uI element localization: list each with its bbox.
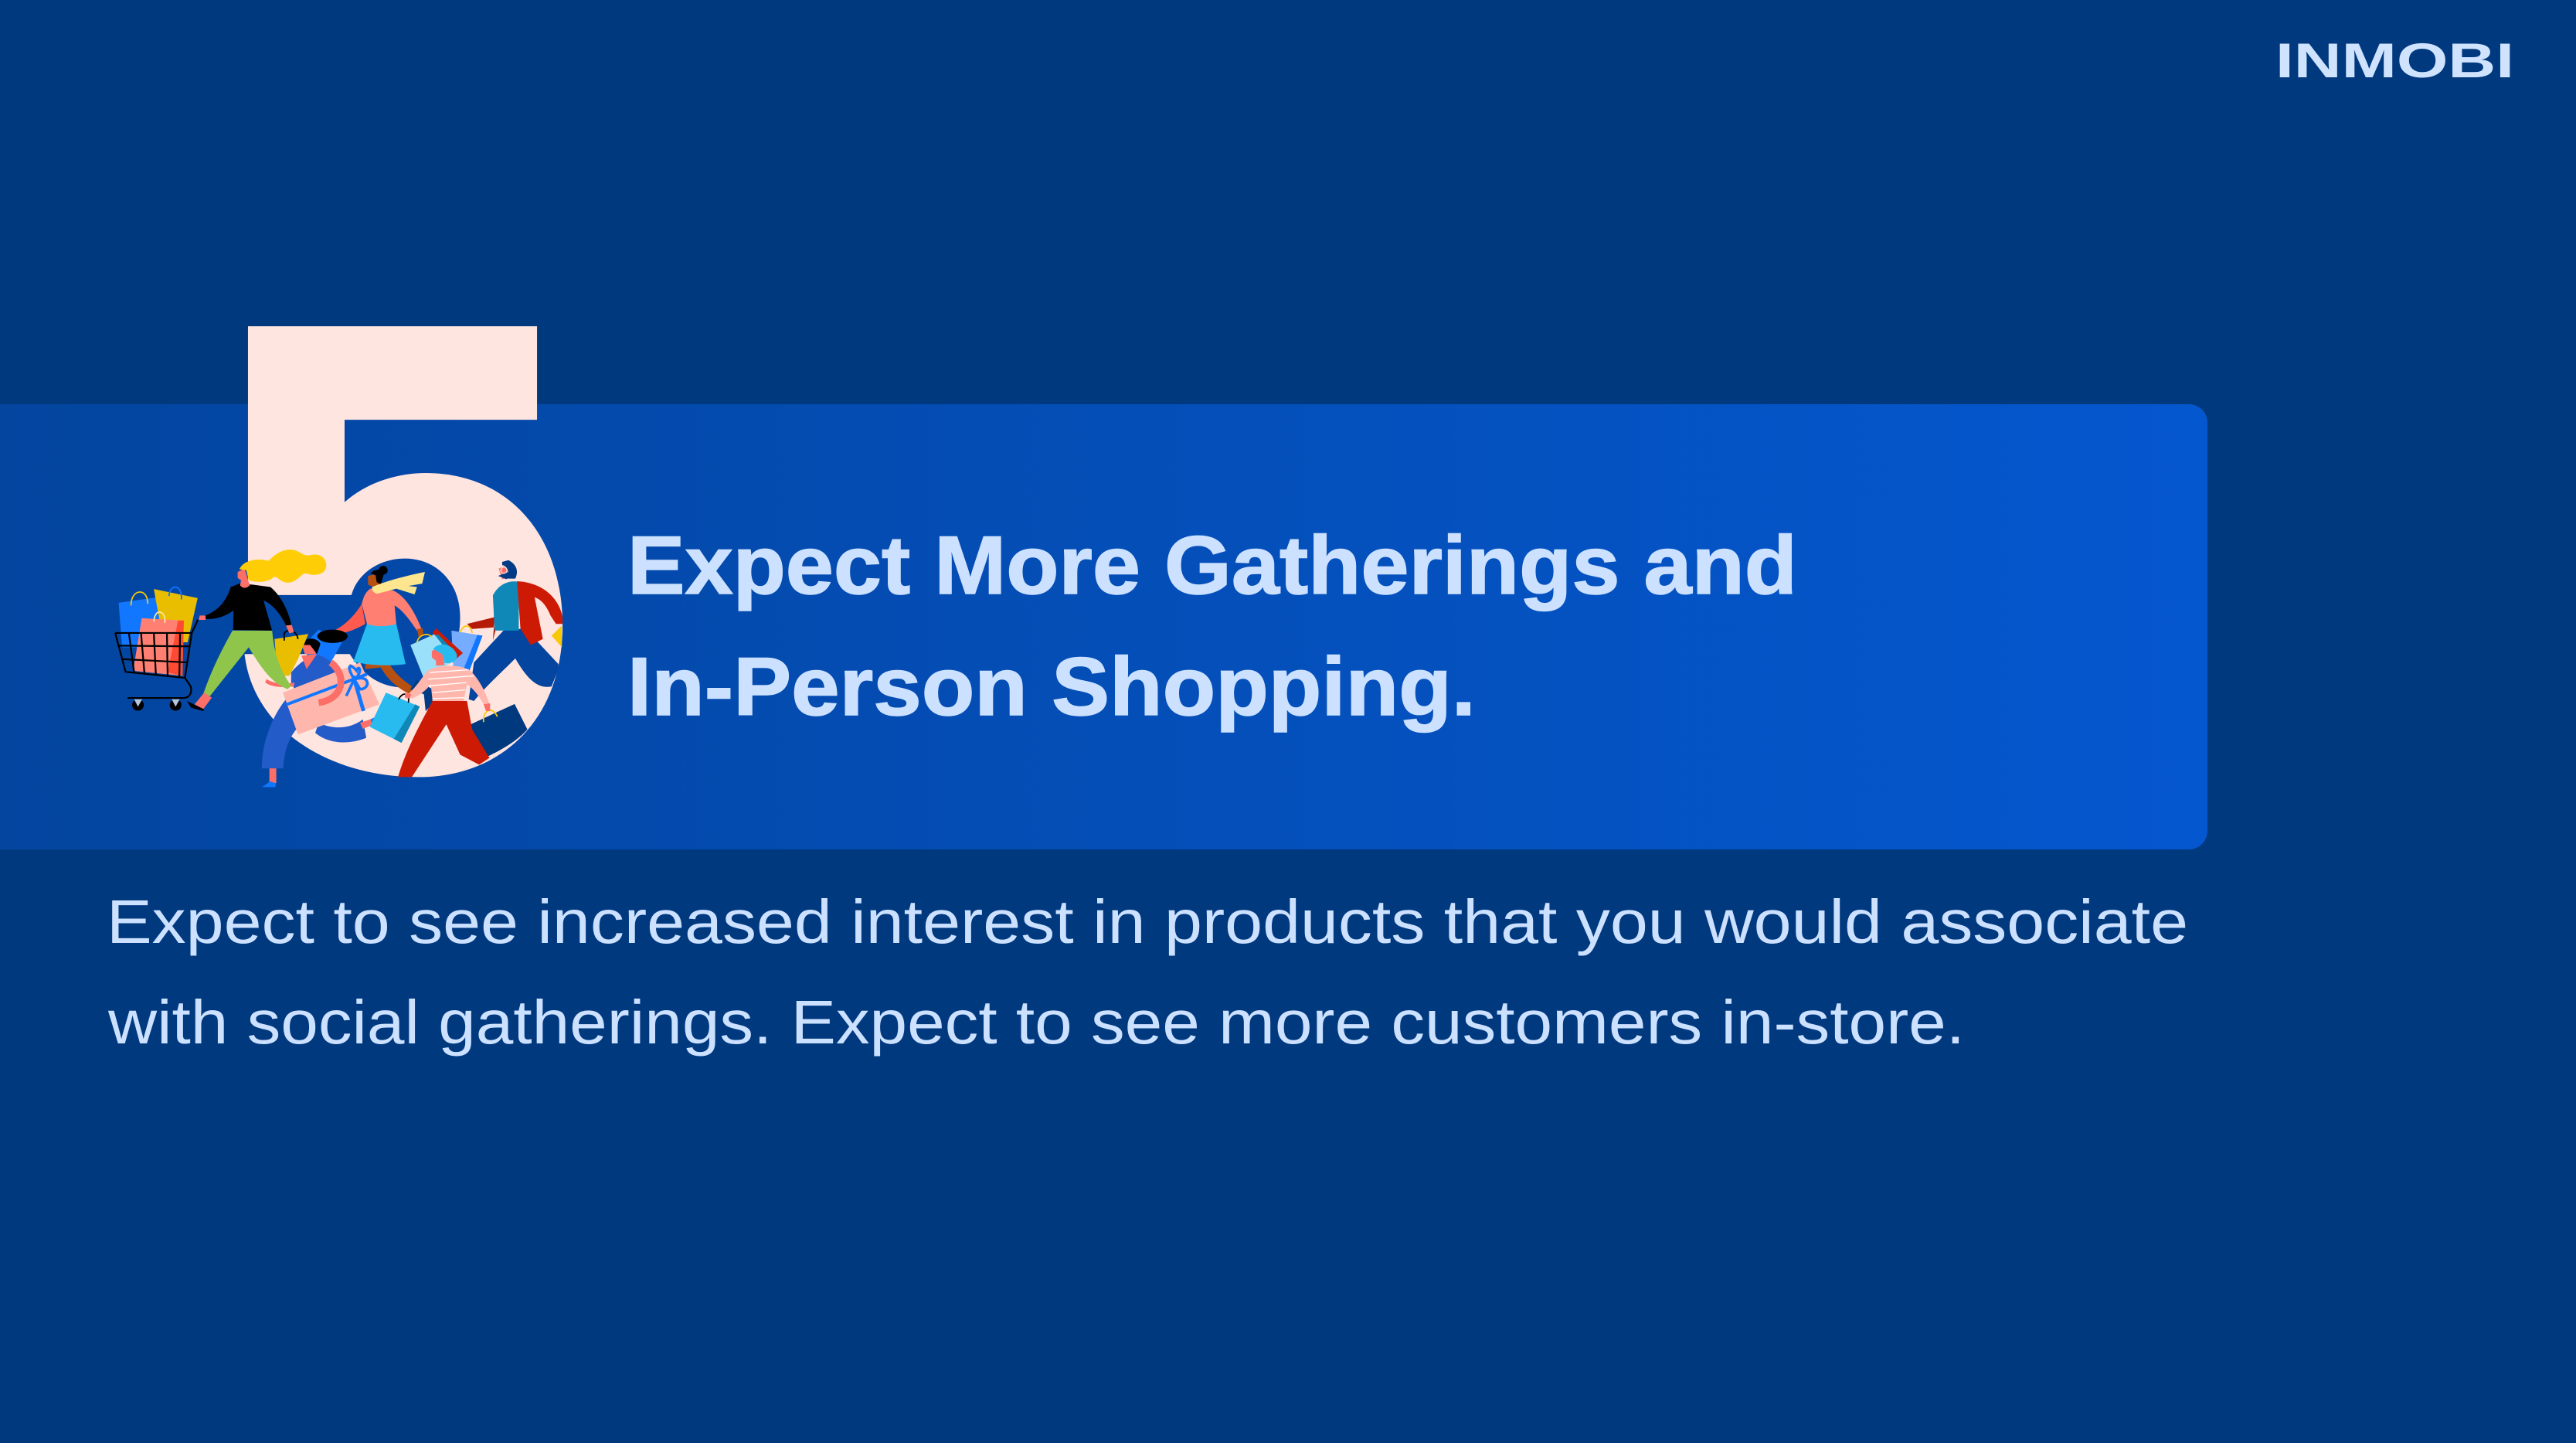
illustration: number five with shoppers [115, 326, 562, 787]
body text [107, 887, 2188, 1057]
body text: Expect to see increased interest in products that you would associate [107, 887, 2188, 956]
man's blue shopping bag [451, 631, 483, 672]
panel: headline banner [0, 404, 2207, 849]
pale blue bag [433, 628, 463, 659]
heading [627, 519, 1797, 733]
shopper: woman with gift box [262, 630, 381, 787]
shopper: woman in green trousers with cart [187, 550, 326, 711]
shopper: man in red jacket [451, 560, 562, 701]
heading: In-Person Shopping. [627, 640, 1476, 733]
scarf [372, 572, 425, 594]
flowing hair [240, 550, 326, 583]
navy bag [465, 704, 528, 761]
light blue bag [370, 693, 420, 743]
body text: with social gatherings. Expect to see more customers in-store. [107, 988, 1965, 1057]
shopping cart with bags [115, 587, 198, 711]
shopper: woman in blue skirt [335, 566, 463, 711]
shopper: woman in striped top [370, 645, 528, 777]
numeral 5 [245, 326, 562, 777]
yellow bag [274, 634, 308, 676]
logo: InMobi: INMOBI [2275, 34, 2514, 88]
heading: Expect More Gatherings and [627, 519, 1797, 611]
gift box [283, 662, 379, 734]
